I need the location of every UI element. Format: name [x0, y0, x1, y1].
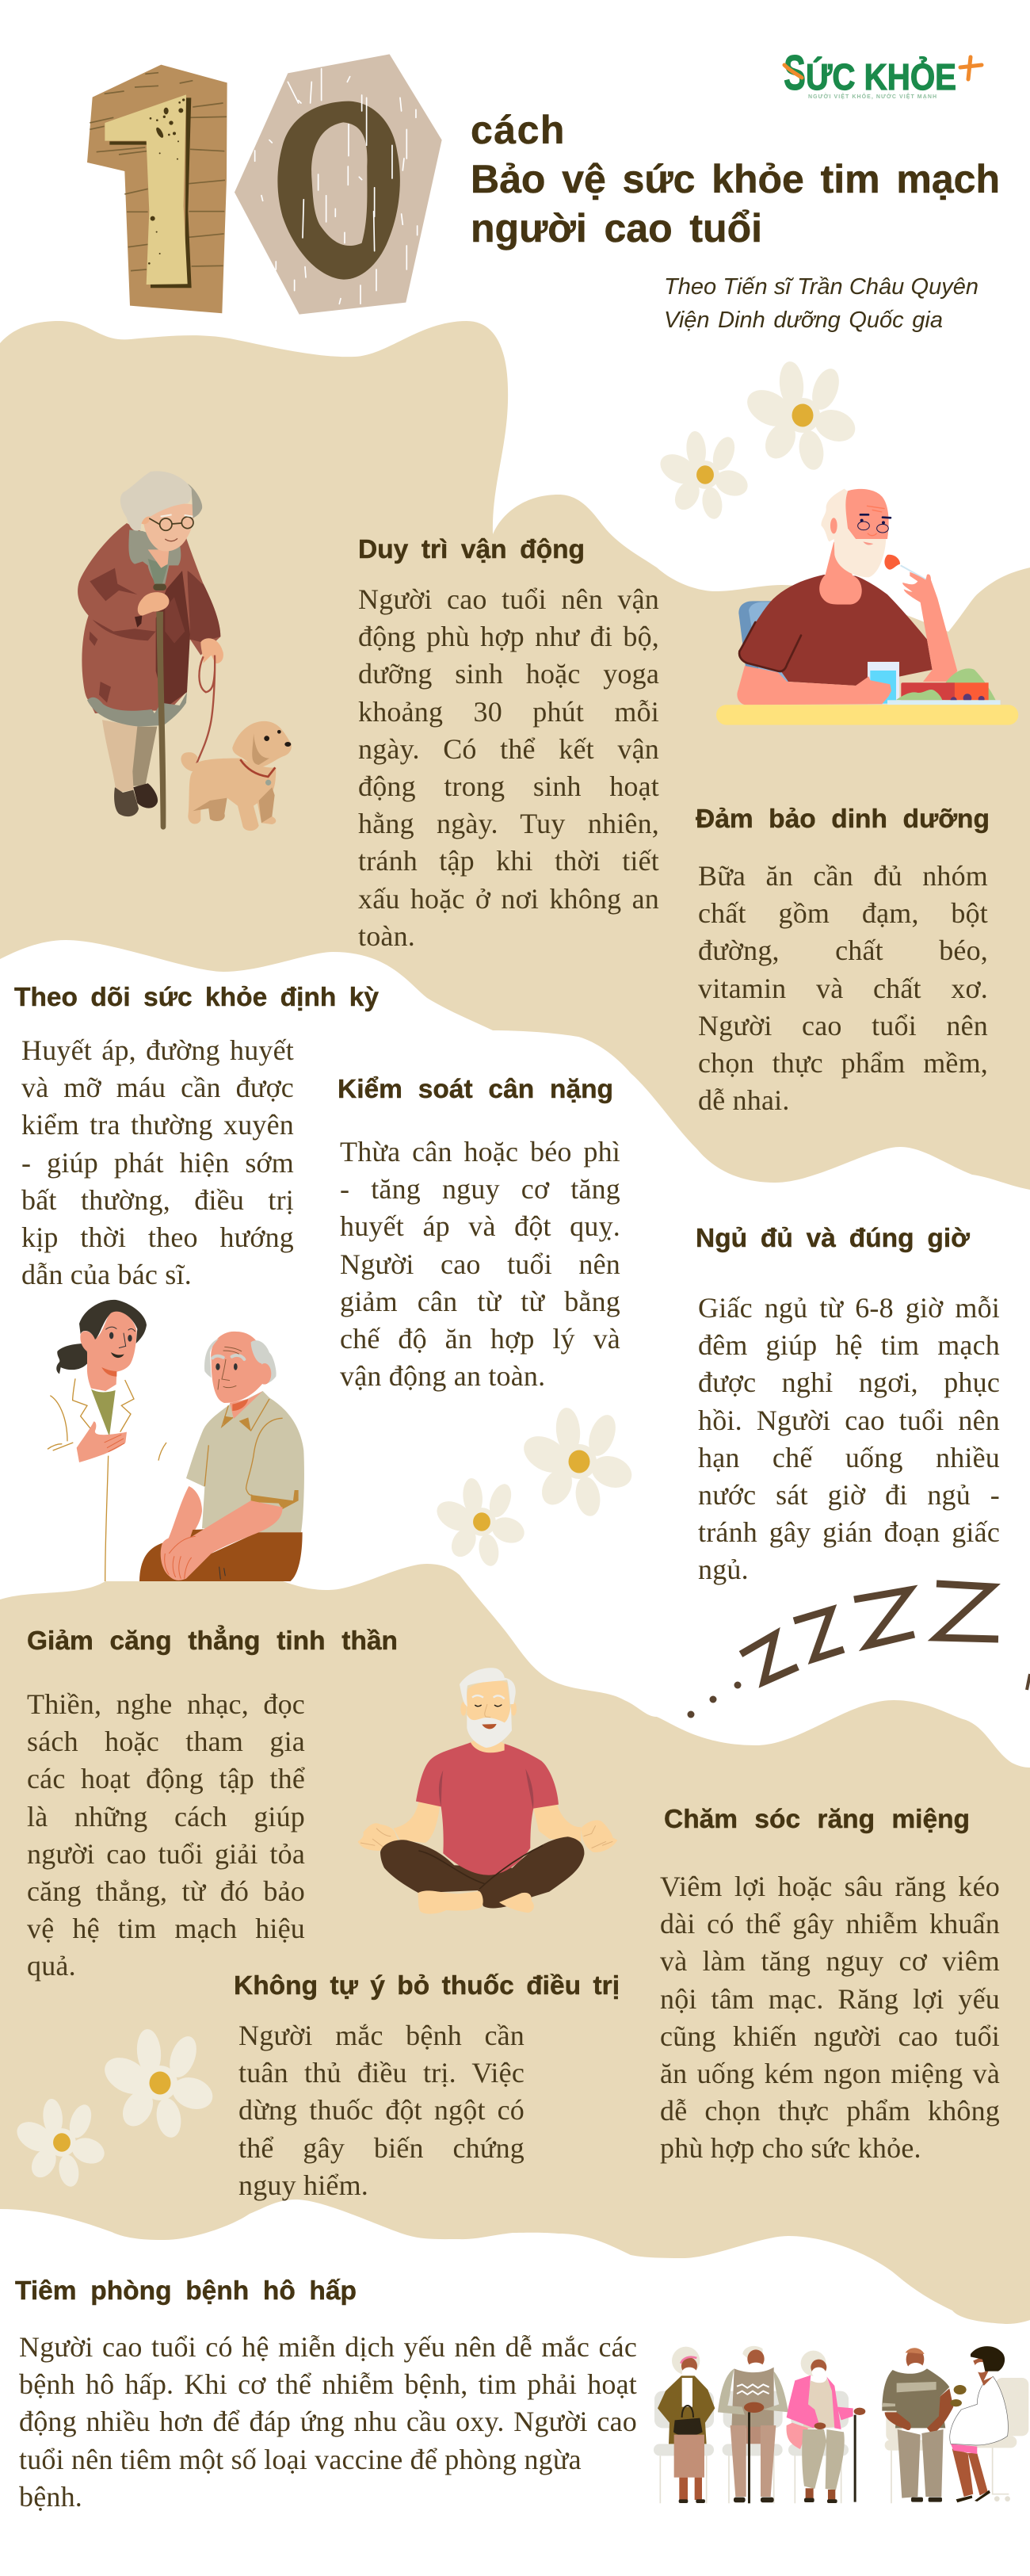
body text: cũng khiến người cao tuổi	[660, 2020, 1000, 2052]
illustration: doctor and elderly patient	[48, 1300, 304, 1581]
patient	[139, 1332, 304, 1581]
body text	[660, 1871, 1000, 2164]
body text: Người mắc bệnh cần	[238, 2020, 525, 2051]
title	[471, 108, 1000, 250]
body text: tuổi nên tiêm một số loại vaccine để phòng ngừa	[19, 2444, 582, 2475]
body text: bất thường, điều trị	[21, 1184, 294, 1216]
body text: Bữa ăn cần đủ nhóm	[698, 860, 988, 892]
nurse giving the injection	[950, 2346, 1008, 2502]
zzzz sleep lettering	[688, 1584, 1030, 1718]
body text: - tăng nguy cơ tăng	[340, 1173, 620, 1205]
illustration: old man eating	[716, 489, 1018, 725]
panel: kiểm soát cân nặng	[338, 1075, 620, 1392]
body text: kịp thời theo hướng	[21, 1221, 294, 1253]
body text: Người cao tuổi có hệ miễn dịch yếu nên dễ mắc các	[19, 2331, 637, 2363]
body text: đêm giúp hệ tim mạch	[698, 1329, 1000, 1361]
flowers: lower pair	[12, 2028, 217, 2188]
big number 10	[87, 54, 442, 315]
logo: Sức Khỏe+	[784, 46, 982, 101]
body text	[238, 2020, 525, 2201]
digit 1 on wood	[87, 65, 227, 313]
body text: tránh gây gián đoạn giấc	[698, 1516, 1000, 1548]
title: Bảo vệ sức khỏe tim mạch	[471, 157, 1000, 201]
body text: chọn thực phẩm mềm,	[698, 1047, 988, 1079]
digit 0 on stone	[235, 54, 442, 315]
logo: Sức Khỏe+: S	[784, 46, 806, 101]
body text: dẫn của bác sĩ.	[21, 1259, 192, 1290]
body text: Người cao tuổi nên vận	[358, 583, 659, 615]
body text: - giúp phát hiện sớm	[21, 1147, 294, 1179]
body text	[340, 1136, 620, 1392]
title: cách	[471, 108, 566, 152]
heading: Chăm sóc răng miệng	[664, 1805, 970, 1834]
source credit: Viện Dinh dưỡng Quốc gia	[664, 308, 943, 333]
body text: Giấc ngủ từ 6-8 giờ mỗi	[698, 1292, 1000, 1324]
body text: chế độ ăn hợp lý và	[340, 1323, 620, 1355]
source credit: Theo Tiến sĩ Trần Châu Quyên	[664, 274, 978, 300]
body text: quả.	[27, 1950, 76, 1982]
body text: bệnh hô hấp. Khi cơ thể nhiễm bệnh, tim phải hoạt	[19, 2368, 637, 2400]
body text: ăn uống kém ngon miệng và	[660, 2058, 1000, 2089]
woman in pink cardigan	[787, 2351, 865, 2503]
body text: Thừa cân hoặc béo phì	[340, 1136, 620, 1168]
heading: Đảm bảo dinh dưỡng	[696, 805, 990, 834]
body text: Viêm lợi hoặc sâu răng kéo	[660, 1871, 1000, 1902]
body text: động phù hợp như đi bộ,	[358, 621, 659, 652]
body text	[358, 583, 659, 952]
body text: vitamin và chất xơ.	[698, 973, 988, 1004]
body text: ngủ.	[698, 1554, 749, 1585]
body text: hằng ngày. Tuy nhiên,	[358, 808, 659, 839]
body text: Người cao tuổi nên	[340, 1248, 620, 1280]
body text: Người cao tuổi nên	[698, 1010, 988, 1041]
heading: Theo dõi sức khỏe định kỳ	[14, 983, 379, 1012]
man with cane	[718, 2346, 788, 2503]
body text	[698, 860, 988, 1116]
body text: dừng thuốc đột ngột có	[238, 2094, 525, 2126]
body text: tuân thủ điều trị. Việc	[238, 2057, 525, 2089]
body text: thể gây biến chứng	[238, 2132, 525, 2164]
body text: huyết áp và đột quỵ.	[340, 1210, 620, 1242]
body text: dài có thể gây nhiễm khuẩn	[660, 1908, 1000, 1940]
illustration: grandmother walking a dog	[78, 471, 292, 831]
body text	[27, 1688, 305, 1982]
body text: động trong sinh hoạt	[358, 770, 659, 802]
body text: dưỡng sinh hoặc yoga	[358, 658, 659, 690]
heading: Giảm căng thẳng tinh thần	[27, 1626, 398, 1656]
body text: động nhiều hơn để đáp ứng nhu cầu oxy. Người cao	[19, 2406, 637, 2437]
body text: được nghỉ ngơi, phục	[698, 1366, 1000, 1398]
source credit	[664, 274, 978, 333]
body text: bệnh.	[19, 2481, 82, 2513]
background blob: lower	[0, 1564, 1030, 2324]
body text: nước sát giờ đi ngủ -	[698, 1479, 1000, 1511]
body text	[21, 1034, 294, 1290]
chairs	[654, 2378, 1028, 2503]
woman with handbag	[658, 2347, 715, 2503]
body text: kiểm tra thường xuyên	[21, 1109, 294, 1141]
heading: Kiểm soát cân nặng	[338, 1075, 613, 1104]
body text: các hoạt động tập thể	[27, 1763, 305, 1794]
doctor	[48, 1300, 166, 1581]
body text: khoảng 30 phút mỗi	[358, 696, 659, 728]
logo: Sức Khỏe+: NGƯỜI VIỆT KHỎE, NƯỚC VIỆT MẠNH	[808, 93, 937, 100]
body text: dễ chọn thực phẩm không	[660, 2095, 1000, 2127]
body text: và làm tăng nguy cơ viêm	[660, 1945, 1000, 1977]
body text: xấu hoặc ở nơi không an	[358, 883, 659, 915]
body text: toàn.	[358, 920, 415, 952]
title: người cao tuổi	[471, 206, 762, 250]
body text: là những cách giúp	[27, 1801, 305, 1833]
panel: theo dõi sức khỏe định kỳ	[14, 983, 379, 1290]
body text: dễ nhai.	[698, 1084, 790, 1116]
body text	[19, 2331, 637, 2513]
body text: người cao tuổi giải tỏa	[27, 1838, 305, 1870]
body text: hồi. Người cao tuổi nên	[698, 1405, 1000, 1436]
illustration: man meditating	[358, 1668, 617, 1914]
body text: nội tâm mạc. Răng lợi yếu	[660, 1983, 1000, 2015]
heading: Ngủ đủ và đúng giờ	[696, 1224, 970, 1253]
body text: và mỡ máu cần được	[21, 1072, 294, 1103]
body text: ngày. Có thể kết vận	[358, 733, 659, 765]
man receiving vaccine	[882, 2348, 953, 2502]
panel: tiêm phòng bệnh hô hấp	[15, 2276, 637, 2513]
panel: giảm căng thẳng tinh thần	[27, 1625, 398, 1982]
body text: giảm cân từ từ bằng	[340, 1286, 620, 1317]
body text: nguy hiểm.	[238, 2169, 368, 2201]
panel: không tự ý bỏ thuốc điều trị	[234, 1971, 620, 2201]
body text: vệ hệ tim mạch hiệu	[27, 1913, 305, 1944]
body text: vận động an toàn.	[340, 1360, 545, 1392]
body text: Huyết áp, đường huyết	[21, 1034, 294, 1066]
logo: Sức Khỏe+: ỨC KHỎE	[806, 56, 956, 97]
body text: tránh tập khi thời tiết	[358, 845, 659, 877]
heading: Không tự ý bỏ thuốc điều trị	[234, 1971, 620, 2001]
panel: chăm sóc răng miệng	[660, 1805, 1000, 2164]
body text: sách hoặc tham gia	[27, 1726, 305, 1757]
body text: chất gồm đạm, bột	[698, 897, 988, 929]
panel: ngủ đủ và đúng giờ	[696, 1224, 1000, 1585]
panel: đảm bảo dinh dưỡng	[696, 805, 990, 1116]
body text: căng thẳng, từ đó bảo	[27, 1875, 305, 1907]
body text: đường, chất béo,	[698, 934, 988, 966]
body text: phù hợp cho sức khỏe.	[660, 2132, 921, 2164]
panel: duy trì vận động	[358, 535, 659, 952]
body text: Thiền, nghe nhạc, đọc	[27, 1688, 305, 1720]
heading: Tiêm phòng bệnh hô hấp	[15, 2276, 357, 2306]
flowers: top pair	[655, 361, 860, 521]
body text: hạn chế uống nhiều	[698, 1442, 1000, 1473]
heading: Duy trì vận động	[358, 535, 585, 564]
body text	[698, 1292, 1000, 1585]
background blob: upper	[0, 321, 1030, 1190]
flowers: middle pair	[432, 1407, 636, 1568]
illustration: elderly people waiting for vaccination	[654, 2346, 1028, 2503]
